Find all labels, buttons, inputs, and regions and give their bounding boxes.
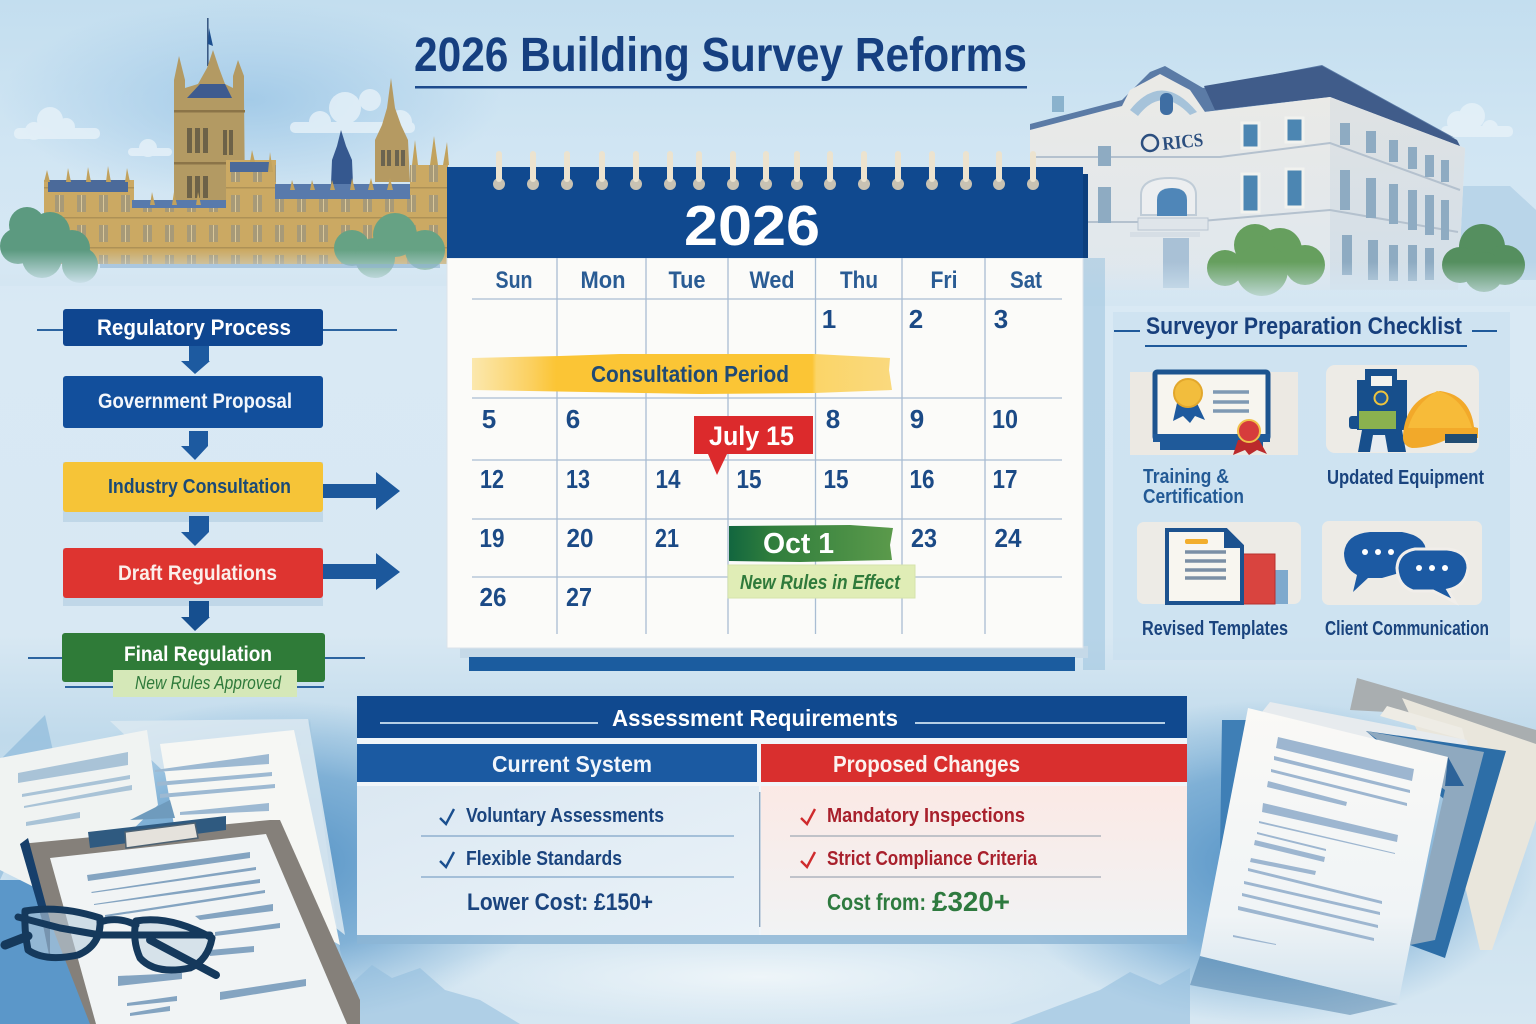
panel: assessment requirements bbox=[357, 696, 1187, 935]
step: regulatory process bbox=[63, 309, 323, 346]
date numbers: 17 bbox=[992, 464, 1018, 494]
title: 2026 Building Survey Reforms bbox=[414, 29, 1027, 82]
column: current system: Current System bbox=[492, 751, 652, 777]
date numbers: 20 bbox=[566, 523, 594, 553]
checklist heading: Surveyor Preparation Checklist bbox=[1146, 313, 1462, 340]
date numbers: 27 bbox=[566, 582, 592, 612]
date numbers: 5 bbox=[482, 404, 496, 434]
weekday labels: Wed bbox=[750, 267, 794, 294]
column: proposed changes: Mandatory Inspections bbox=[827, 805, 1025, 827]
label: certification: Certification bbox=[1143, 486, 1244, 508]
flow: regulatory process bbox=[28, 309, 400, 697]
date numbers: 21 bbox=[655, 523, 679, 553]
card: client communication bbox=[1322, 521, 1489, 640]
Victoria Tower bbox=[174, 50, 245, 200]
arrow right bbox=[323, 472, 400, 510]
binder rings bbox=[493, 151, 1039, 190]
weekday labels: Mon bbox=[580, 267, 626, 294]
step: regulatory process: Regulatory Process bbox=[97, 315, 291, 340]
column: current system: Flexible Standards bbox=[466, 848, 622, 870]
date numbers: 3 bbox=[994, 304, 1008, 334]
panel: surveyor preparation checklist bbox=[1113, 312, 1510, 660]
date numbers: 1 bbox=[822, 304, 836, 334]
date numbers: 16 bbox=[910, 464, 934, 494]
date numbers: 13 bbox=[566, 464, 590, 494]
RICS logo bbox=[1142, 130, 1204, 155]
weekday labels: Thu bbox=[840, 267, 878, 294]
date numbers bbox=[480, 304, 1022, 612]
card: updated equipment bbox=[1326, 365, 1484, 489]
date numbers: 12 bbox=[480, 464, 504, 494]
date numbers: 26 bbox=[480, 582, 506, 612]
column: current system: Lower Cost: £150+ bbox=[467, 889, 653, 916]
column: current system bbox=[357, 744, 759, 935]
card: training and certification bbox=[1130, 372, 1298, 488]
calendar header bbox=[447, 167, 1088, 258]
illustration: clipboard, papers and glasses bbox=[0, 715, 360, 1024]
clipboard bbox=[20, 800, 360, 1024]
arrow down bbox=[181, 431, 208, 460]
weekday labels: Tue bbox=[668, 267, 706, 294]
clouds bbox=[14, 89, 1513, 157]
date numbers: 6 bbox=[566, 404, 580, 434]
illustration: RICS headquarters bbox=[1030, 65, 1536, 306]
date numbers: 15 bbox=[824, 464, 848, 494]
consultation period band bbox=[472, 354, 892, 394]
table heading bbox=[357, 696, 1187, 738]
flag and pole bbox=[207, 18, 213, 66]
calendar header: 2026 bbox=[684, 194, 820, 258]
Oct 1 banner bbox=[729, 525, 893, 562]
column: proposed changes: Strict Compliance Criteria bbox=[827, 848, 1038, 870]
arrow down bbox=[181, 601, 210, 631]
step: government proposal: Government Proposal bbox=[98, 390, 292, 413]
July 15 flag: July 15 bbox=[709, 421, 794, 451]
date numbers: 8 bbox=[826, 404, 840, 434]
step: government proposal bbox=[63, 376, 323, 428]
glasses bbox=[5, 909, 216, 975]
arrow down bbox=[181, 346, 210, 374]
date numbers: 24 bbox=[994, 523, 1022, 553]
date numbers: 2 bbox=[909, 304, 923, 334]
new rules in effect tag bbox=[728, 565, 915, 598]
new rules approved tag: New Rules Approved bbox=[135, 673, 282, 693]
arrow down bbox=[181, 516, 209, 546]
date numbers: 9 bbox=[910, 404, 924, 434]
trees bbox=[0, 207, 445, 283]
central spire and blue dome bbox=[331, 78, 410, 184]
step: industry consultation bbox=[63, 462, 323, 522]
card: revised templates bbox=[1137, 522, 1301, 640]
label: Client Communication bbox=[1325, 618, 1489, 640]
date numbers: 19 bbox=[480, 523, 504, 553]
column: proposed changes: Proposed Changes bbox=[833, 751, 1020, 777]
weekday labels bbox=[496, 267, 1042, 294]
column: proposed changes: Cost from: bbox=[827, 889, 926, 915]
Oct 1 banner: Oct 1 bbox=[763, 528, 834, 560]
label: Training & bbox=[1143, 466, 1229, 488]
main range bbox=[44, 136, 449, 264]
RICS logo: RICS bbox=[1161, 130, 1204, 155]
table heading: Assessment Requirements bbox=[612, 705, 898, 731]
step: final regulation bbox=[62, 633, 325, 682]
date numbers: 10 bbox=[992, 404, 1018, 434]
consultation period band: Consultation Period bbox=[591, 361, 789, 387]
weekday labels: Sat bbox=[1010, 267, 1042, 294]
date numbers: 23 bbox=[911, 523, 937, 553]
step: draft regulations: Draft Regulations bbox=[118, 562, 277, 585]
calendar bbox=[447, 151, 1105, 671]
new rules in effect tag: New Rules in Effect bbox=[740, 572, 901, 594]
column: proposed changes: £320+ bbox=[932, 886, 1010, 917]
weekday labels: Sun bbox=[496, 267, 532, 294]
step: draft regulations bbox=[63, 548, 323, 606]
trees bbox=[1207, 224, 1525, 296]
calendar grid bbox=[472, 258, 1062, 634]
label: Revised Templates bbox=[1142, 618, 1288, 640]
new rules approved tag bbox=[113, 670, 297, 697]
date numbers: 15 bbox=[736, 464, 762, 494]
illustration: Houses of Parliament bbox=[0, 18, 450, 286]
column: proposed changes bbox=[759, 744, 1187, 935]
step: final regulation: Final Regulation bbox=[124, 643, 272, 666]
arrow right bbox=[323, 553, 400, 590]
weekday labels: Fri bbox=[930, 267, 958, 294]
step: industry consultation: Industry Consultation bbox=[108, 476, 291, 498]
July 15 flag bbox=[694, 416, 813, 475]
column: current system: Voluntary Assessments bbox=[466, 805, 664, 827]
date numbers: 14 bbox=[656, 464, 681, 494]
illustration: stack of documents bbox=[1190, 678, 1536, 1015]
label: Updated Equipment bbox=[1327, 467, 1484, 489]
